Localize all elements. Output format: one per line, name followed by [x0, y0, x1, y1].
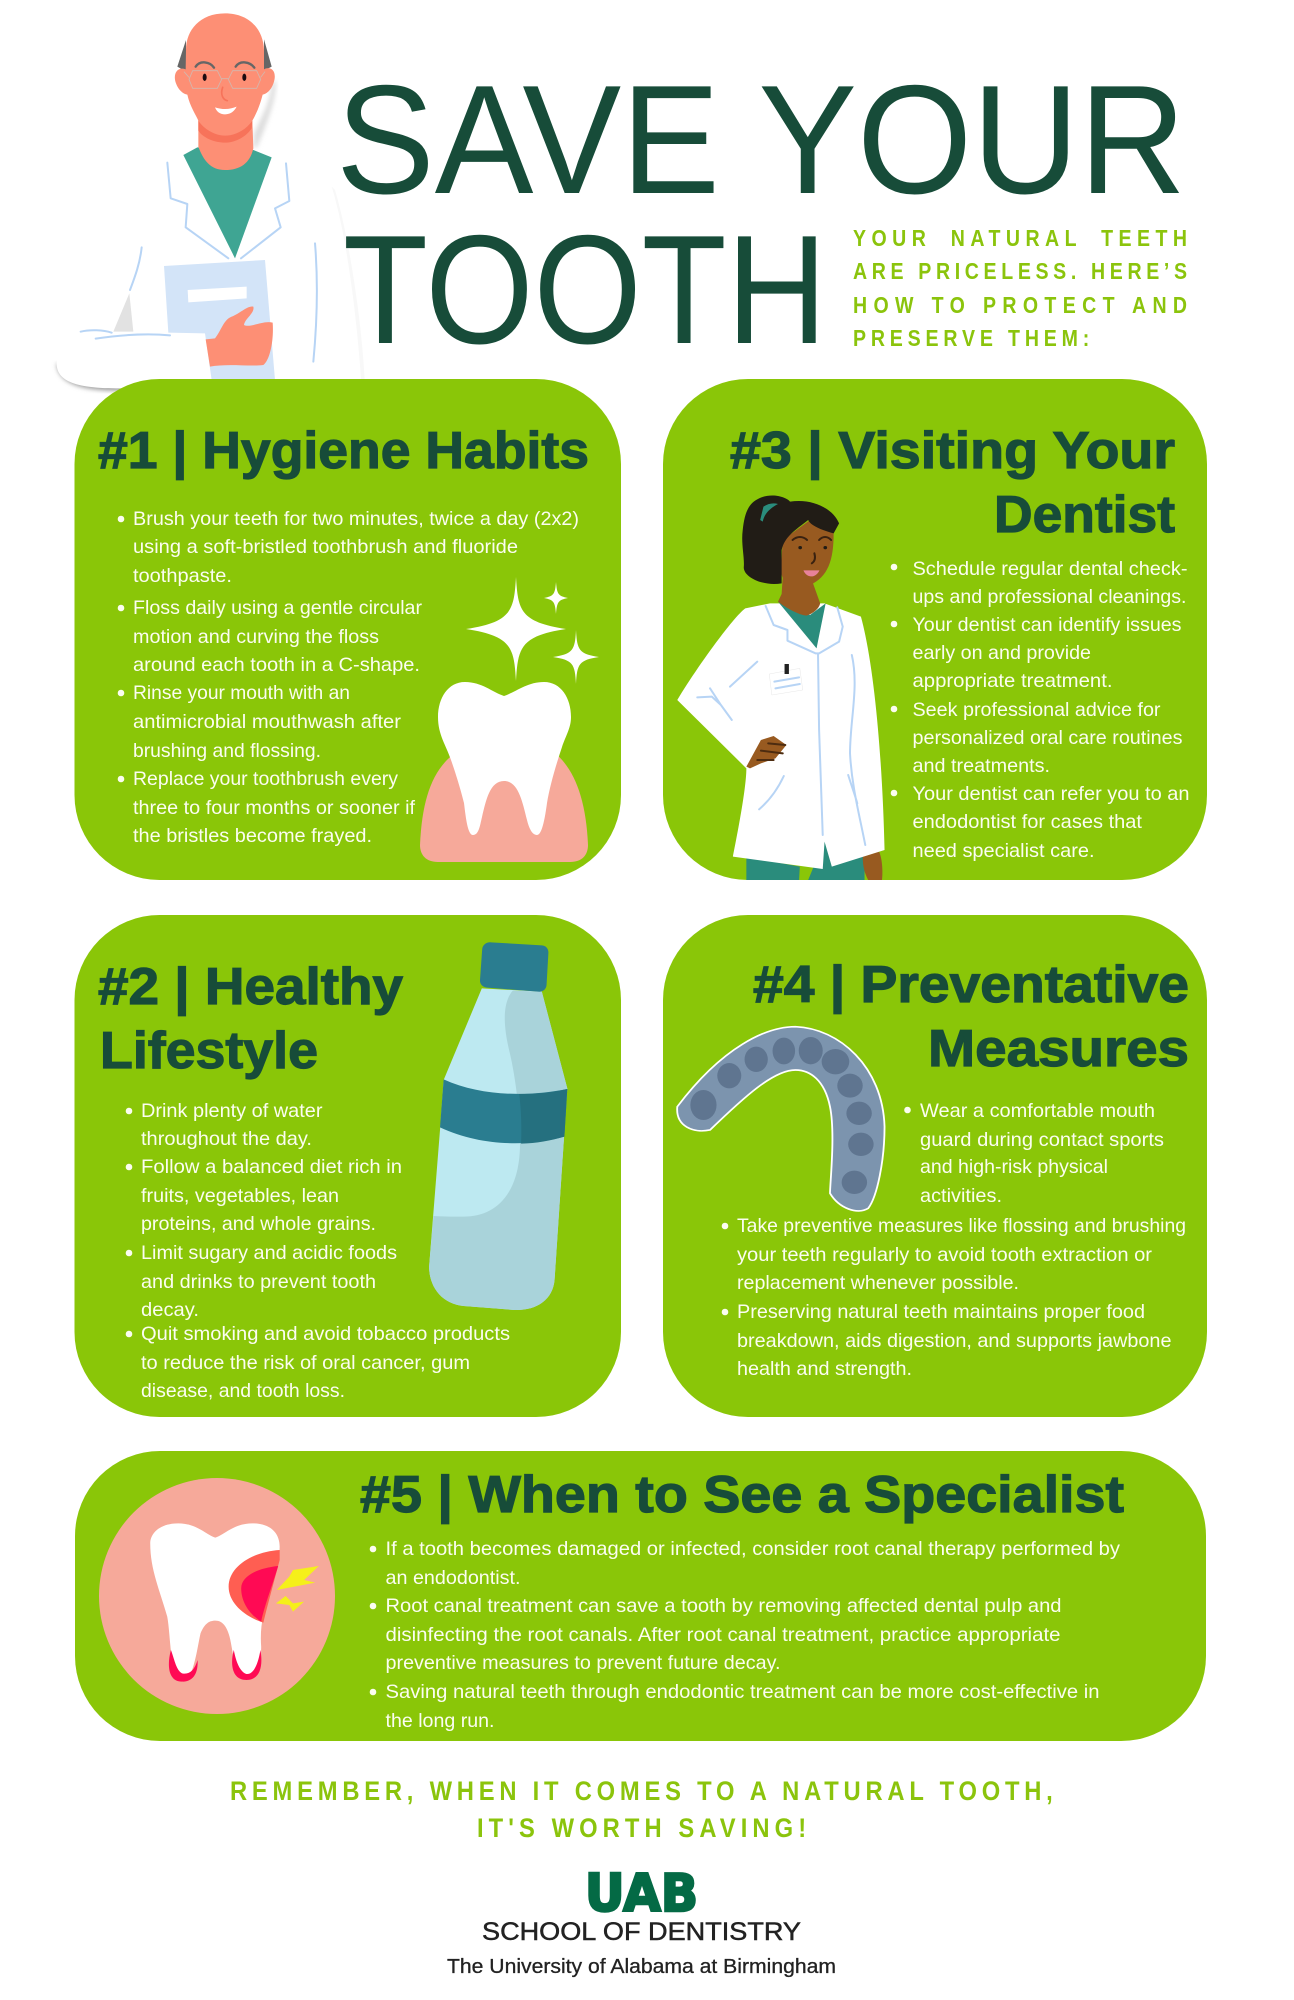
bullet list: lifestyle tips — [126, 1100, 510, 1402]
bullet list: dentist tips: Schedule regular dental check- — [912, 558, 1188, 580]
bullet list: dentist tips: and treatments. — [912, 755, 1050, 777]
subtitle: YOUR NATURAL TEETH — [853, 226, 1187, 251]
bullet list: prevention tips: and high-risk physical — [920, 1156, 1108, 1178]
heading: when to see a specialist: #5 | When to See a Specialist — [360, 1466, 1124, 1524]
bullet list: lifestyle tips: Limit sugary and acidic foods — [141, 1242, 397, 1264]
bullet list: prevention tips: breakdown, aids digestion, and supports jawbone — [737, 1330, 1172, 1352]
closing message — [230, 1777, 1053, 1843]
bullet list: hygiene tips: three to four months or sooner if — [133, 797, 416, 819]
bullet list: prevention tips: Preserving natural teeth maintains proper food — [737, 1301, 1145, 1323]
bullet list: hygiene tips: Brush your teeth for two minutes, twice a day (2x2) — [133, 508, 579, 530]
bullet list: hygiene tips: using a soft-bristled toothbrush and fluoride — [133, 536, 518, 558]
bullet list: prevention tips: Take preventive measures like flossing and brushing — [737, 1215, 1186, 1237]
heading: healthy lifestyle: Lifestyle — [100, 1022, 318, 1080]
heading: healthy lifestyle — [98, 958, 403, 1080]
bullet list: dentist tips: ups and professional cleanings. — [912, 586, 1186, 608]
heading: preventative measures: #4 | Preventative — [753, 956, 1189, 1014]
bullet list: lifestyle tips: decay. — [141, 1299, 199, 1321]
bullet list: lifestyle tips: Drink plenty of water — [141, 1100, 323, 1122]
bullet list: dentist tips: Your dentist can refer you to an — [912, 783, 1190, 805]
bullet list: specialist guidance: the long run. — [386, 1710, 494, 1732]
bullet list: specialist guidance: Saving natural teeth through endodontic treatment can be more cost-effective in — [386, 1681, 1100, 1703]
bullet list: lifestyle tips: to reduce the risk of oral cancer, gum — [141, 1352, 470, 1374]
illustration: female dentist — [677, 495, 885, 880]
title — [336, 53, 1186, 376]
bullet list: prevention tips: replacement whenever possible. — [737, 1272, 1019, 1294]
bullet list: hygiene tips: brushing and flossing. — [133, 740, 321, 762]
bullet list: dentist tips: endodontist for cases that — [912, 811, 1143, 833]
bullet list: prevention tips: guard during contact sports — [920, 1129, 1164, 1151]
logo: UAB School of Dentistry — [447, 1864, 836, 1978]
panel: when to see a specialist — [75, 1451, 1206, 1741]
illustration: male dentist — [57, 13, 365, 391]
bullet list: prevention tips: your teeth regularly to avoid tooth extraction or — [737, 1244, 1153, 1266]
bullet list: prevention tips: activities. — [920, 1185, 1002, 1207]
bullet list: hygiene tips: Rinse your mouth with an — [133, 682, 350, 704]
bullet list: hygiene tips: motion and curving the floss — [133, 626, 379, 648]
closing message: REMEMBER, WHEN IT COMES TO A NATURAL TOOTH, — [230, 1777, 1053, 1806]
icon: water bottle — [429, 942, 567, 1310]
bullet list: lifestyle tips: throughout the day. — [141, 1128, 312, 1150]
bullet list: dentist tips — [891, 558, 1190, 862]
bullet list: lifestyle tips: and drinks to prevent tooth — [141, 1271, 376, 1293]
title: TOOTH — [343, 203, 827, 376]
heading: visiting your dentist: Dentist — [994, 486, 1175, 544]
panel: preventative measures — [663, 915, 1207, 1417]
bullet list: hygiene tips: toothpaste. — [133, 565, 232, 587]
closing message: IT'S WORTH SAVING! — [477, 1814, 806, 1843]
subtitle: ARE PRICELESS. HERE’S — [853, 259, 1187, 284]
bullet list: hygiene tips: the bristles become frayed. — [133, 825, 372, 847]
panel: visiting your dentist — [663, 379, 1207, 880]
logo: UAB School of Dentistry: SCHOOL OF DENTISTRY — [482, 1918, 801, 1946]
bullet list: dentist tips: need specialist care. — [912, 840, 1094, 862]
bullet list: hygiene tips — [118, 508, 579, 847]
bullet list: specialist guidance: an endodontist. — [386, 1567, 520, 1589]
bullet list: prevention tips: health and strength. — [737, 1358, 912, 1380]
panel: hygiene habits — [74, 379, 621, 880]
bullet list: prevention tips — [722, 1100, 1186, 1380]
heading: preventative measures: Measures — [928, 1020, 1189, 1078]
title: SAVE YOUR — [336, 53, 1186, 226]
bullet list: specialist guidance: preventive measures to prevent future decay. — [386, 1652, 780, 1674]
bullet list: specialist guidance: disinfecting the root canals. After root canal treatment, practice appropriate — [386, 1624, 1060, 1646]
icon: damaged tooth in circle — [99, 1478, 335, 1714]
subtitle: PRESERVE THEM: — [853, 326, 1089, 351]
bullet list: hygiene tips: around each tooth in a C-shape. — [133, 654, 420, 676]
bullet list: lifestyle tips: fruits, vegetables, lean — [141, 1185, 339, 1207]
bullet list: dentist tips: appropriate treatment. — [912, 670, 1112, 692]
panel: healthy lifestyle — [74, 915, 621, 1417]
bullet list: prevention tips: Wear a comfortable mouth — [920, 1100, 1155, 1122]
bullet list: lifestyle tips: disease, and tooth loss. — [141, 1380, 345, 1402]
bullet list: dentist tips: early on and provide — [912, 642, 1091, 664]
subtitle — [853, 226, 1187, 351]
bullet list: dentist tips: personalized oral care routines — [912, 727, 1183, 749]
bullet list: lifestyle tips: Follow a balanced diet rich in — [141, 1156, 402, 1178]
bullet list: dentist tips: Seek professional advice for — [912, 699, 1161, 721]
bullet list: specialist guidance: If a tooth becomes damaged or infected, consider root canal therapy performed by — [386, 1538, 1120, 1560]
bullet list: hygiene tips: Floss daily using a gentle circular — [133, 597, 423, 619]
bullet list: specialist guidance — [370, 1538, 1120, 1732]
heading: hygiene habits: #1 | Hygiene Habits — [98, 422, 589, 480]
logo: UAB School of Dentistry: UAB — [585, 1864, 698, 1924]
icon: tooth with sparkles — [420, 577, 599, 862]
bullet list: dentist tips: Your dentist can identify issues — [912, 614, 1182, 636]
bullet list: lifestyle tips: Quit smoking and avoid tobacco products — [141, 1323, 510, 1345]
icon: mouth guard — [677, 1027, 885, 1211]
heading: visiting your dentist — [730, 422, 1175, 544]
logo: UAB School of Dentistry: The University of Alabama at Birmingham — [447, 1956, 836, 1978]
bullet list: lifestyle tips: proteins, and whole grains. — [141, 1213, 376, 1235]
bullet list: hygiene tips: Replace your toothbrush every — [133, 768, 398, 790]
heading: healthy lifestyle: #2 | Healthy — [98, 958, 403, 1016]
heading: visiting your dentist: #3 | Visiting Your — [730, 422, 1175, 480]
heading: preventative measures — [753, 956, 1189, 1078]
bullet list: specialist guidance: Root canal treatment can save a tooth by removing affected dental pulp and — [386, 1595, 1062, 1617]
subtitle: HOW TO PROTECT AND — [853, 293, 1187, 318]
bullet list: hygiene tips: antimicrobial mouthwash after — [133, 711, 402, 733]
